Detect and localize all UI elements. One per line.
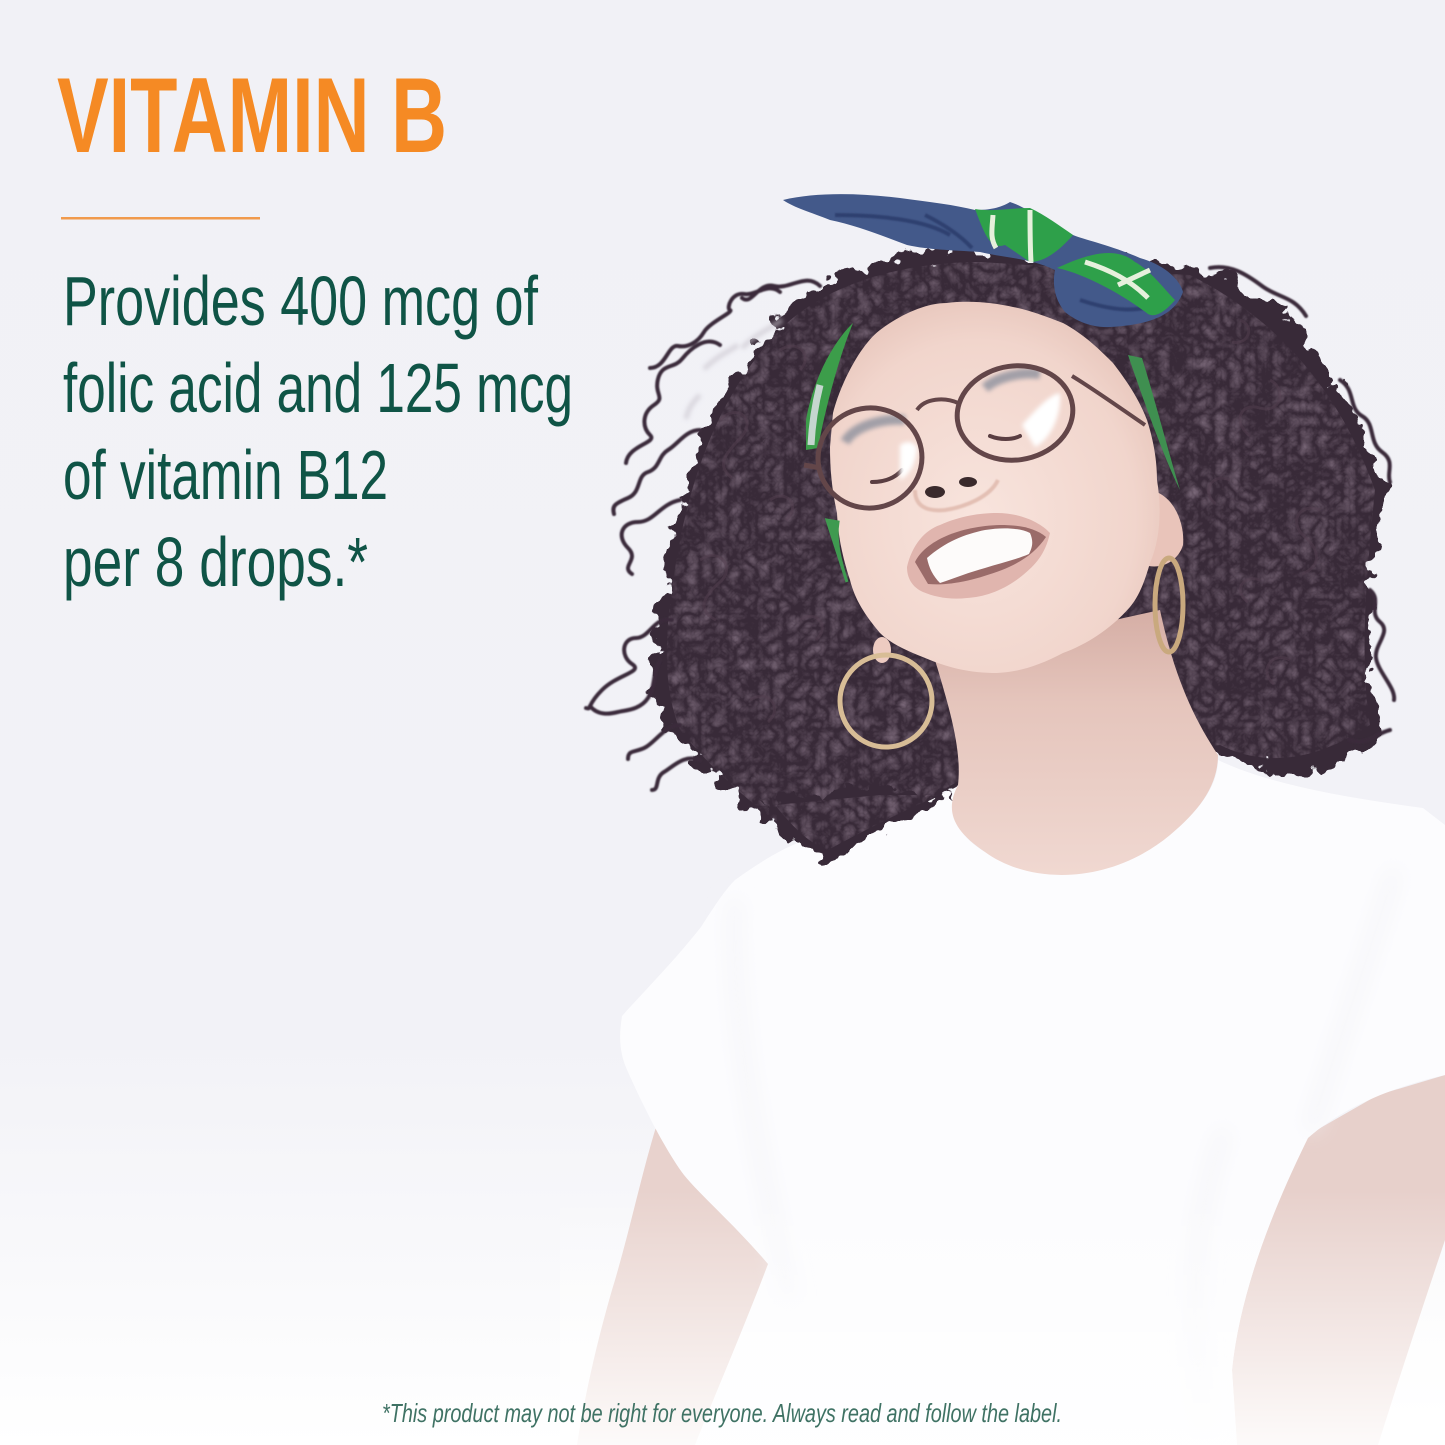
- orange divider: [61, 217, 260, 220]
- head scarf: [783, 194, 1183, 327]
- right arm: [1232, 1075, 1445, 1445]
- closed eyes: [872, 436, 1020, 482]
- footnote: *This product may not be right for everyone. Always read and follow the label.: [382, 1398, 1062, 1428]
- scarf fold shadow: [835, 215, 1165, 309]
- eyebrows behind lenses: [845, 373, 1040, 442]
- left earring: [840, 655, 932, 747]
- lower headband strip: [827, 520, 847, 582]
- bottom white fade: [560, 1190, 1445, 1445]
- lens highlights: [900, 393, 1060, 480]
- neck: [935, 610, 1218, 875]
- face: [830, 302, 1160, 673]
- curly wisps: [586, 267, 1394, 790]
- photo: smiling woman: [577, 194, 1445, 1445]
- glasses: [804, 358, 1145, 516]
- right ear: [1145, 490, 1183, 566]
- t-shirt soft folds: [734, 870, 1395, 1430]
- title: VITAMIN B: [57, 55, 447, 175]
- left ear: [873, 637, 891, 663]
- mouth interior: [915, 525, 1046, 584]
- body text: [63, 262, 573, 601]
- t-shirt: [620, 760, 1445, 1445]
- left headband strip: [806, 323, 853, 450]
- body text: folic acid and 125 mcg: [63, 349, 573, 427]
- hair texture: [667, 262, 1375, 850]
- body text: of vitamin B12: [63, 436, 388, 514]
- teeth: [927, 528, 1032, 583]
- highlighted curls: [700, 320, 1320, 722]
- right headband strip: [1128, 355, 1180, 490]
- headband stripe highlights: [811, 385, 820, 445]
- nose and nostrils: [915, 477, 998, 510]
- hair lock over shirt: [760, 790, 950, 862]
- scarf white stripes: [992, 210, 1150, 298]
- lips: [907, 513, 1050, 599]
- hair: [586, 252, 1394, 858]
- right earring: [1155, 558, 1183, 652]
- body text: Provides 400 mcg of: [63, 262, 538, 340]
- lighter strands in upper left: [686, 320, 782, 419]
- left arm: [577, 1127, 770, 1445]
- body text: per 8 drops.*: [63, 523, 368, 601]
- scarf green pattern: [975, 208, 1073, 262]
